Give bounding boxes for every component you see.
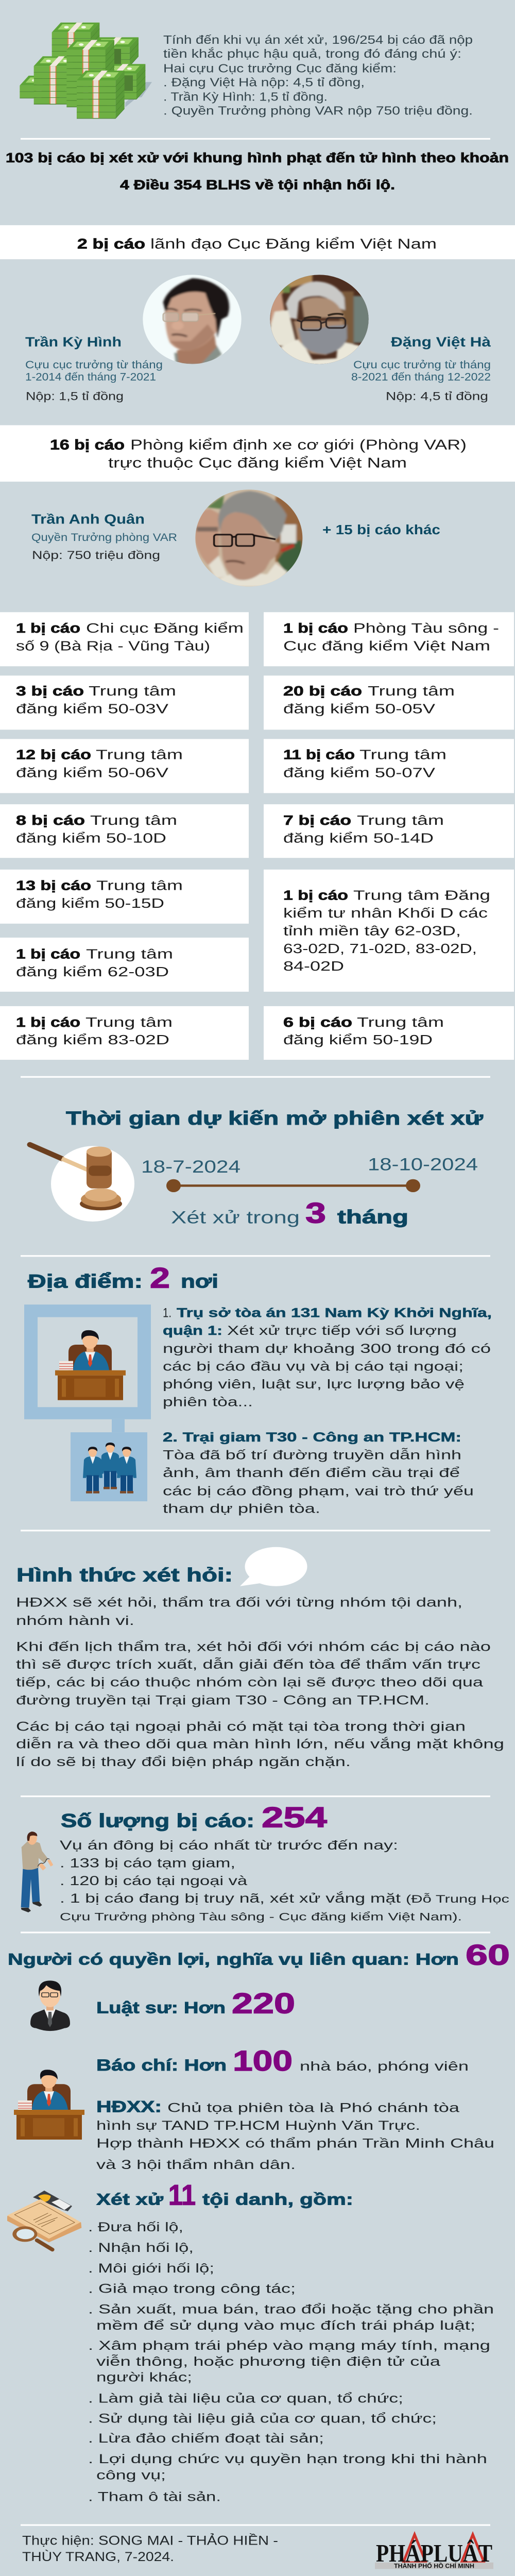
text: defendants breakdown [60,1838,509,1923]
intro text: Hai cựu Cục trưởng Cục đăng kiểm: [163,62,397,75]
text: lawyers [96,1987,295,2020]
card: 3 bị cáo 50-03V: 3 bị cáo [16,684,84,699]
text: press: Báo chí: Hơn [96,2056,227,2075]
text: trial panel: Chủ tọa phiên tòa là Phó chánh tòa [167,2100,459,2115]
card: 1 bị cáo khối D miền tây: 84-02D [283,958,344,974]
text: press: nhà báo, phóng viên [300,2059,469,2074]
heading: trial schedule: Thời gian dự kiến mở phiên xét xử [66,1108,484,1129]
card: 20 bị cáo 50-05V: Trung tâm [368,684,455,699]
text: questioning details [16,1595,504,1769]
photo: Đặng Việt Hà [269,273,372,366]
heading: 11 charges: Xét xử [96,2191,164,2209]
card: 1 bị cáo Chi cục 9: 1 bị cáo [16,620,80,636]
heading: 11 charges: 11 [168,2178,196,2211]
list: charges: viễn thông, hoặc phương tiện điện tử của [96,2354,440,2369]
heading band: 16 defendants VAR [0,425,515,482]
text: questioning details: đường truyền tại Trại giam T30 - Công an TP.HCM. [16,1693,430,1707]
card: 1 bị cáo khối D miền tây: 63-02D, 71-02D, 83-02D, [283,941,477,956]
text: location 1: người tham dự khoảng 300 trong đó có [163,1341,491,1356]
card: 1 bị cáo 83-02D: Trung tâm [85,1014,173,1029]
heading: 11 charges [96,2178,353,2211]
heading: location 2 places: 2 [150,1261,170,1294]
heading: number of defendants [61,1801,327,1834]
heading: related parties: 60 [466,1938,510,1971]
intro text: tiền khắc phục hậu quả, trong đó đáng chú ý: [163,47,461,61]
person: Trần Kỳ Hình: Nộp: 1,5 tỉ đồng [26,390,124,403]
person: Đặng Việt Hà: Nộp: 4,5 tỉ đồng [386,390,488,403]
text: trial panel: HĐXX: [96,2098,162,2116]
logo: Pháp Luật [375,2534,493,2569]
text: questioning details: lí do sẽ bị thay đổi biện pháp ngăn chặn. [16,1754,351,1769]
text: questioning details: diễn ra và theo dõi qua màn hình lớn, nếu vắng mặt không [16,1737,504,1751]
card: 11 bị cáo 50-07V: đăng kiểm 50-07V [283,765,436,780]
list: charges: . Xâm phạm trái phép vào mạng máy tính, mạng [88,2338,490,2353]
card: 13 bị cáo 50-15D: Trung tâm [96,878,183,893]
card: 1 bị cáo 62-03D: đăng kiểm 62-03D [16,964,169,979]
list: charges: . Làm giả tài liệu của cơ quan, tổ chức; [88,2391,403,2405]
intro text: . Trần Kỳ Hình: 1,5 tỉ đồng. [163,91,328,104]
card: 6 bị cáo 50-19D: 6 bị cáo [283,1014,352,1029]
card: 3 bị cáo 50-03V: Trung tâm [89,684,176,699]
card: 1 bị cáo 62-03D: 1 bị cáo [16,946,80,961]
text: location 1: phiên tòa... [163,1395,253,1409]
card: 7 bị cáo 50-14D [264,804,514,858]
card: 1 bị cáo khối D miền tây [264,870,514,992]
text: location 1: phóng viên, luật sư, lực lượng bảo vệ [163,1377,465,1392]
card: 6 bị cáo 50-19D: Trung tâm [357,1014,444,1029]
list: charges [88,2219,494,2504]
card: 3 bị cáo 50-03V [0,675,249,730]
intro text: . Đặng Việt Hà nộp: 4,5 tỉ đồng, [163,76,365,89]
photo: Trần Kỳ Hình [143,275,242,364]
icon: judge at desk [55,1330,126,1400]
text: defendants breakdown: . 133 bị cáo tạm giam, [60,1856,235,1870]
heading: related parties: Người có quyền lợi, nghĩa vụ liên quan: Hơn [8,1951,459,1969]
text: location 2: tham dự phiên tòa. [163,1501,320,1516]
card: 1 bị cáo 83-02D: đăng kiểm 83-02D [16,1032,169,1047]
card: 1 bị cáo Phòng Tàu sông: Cục đăng kiểm Việt Nam [283,638,490,653]
text: location 1: quận 1: [163,1323,222,1338]
heading: number of defendants: 254 [262,1801,327,1834]
card: 13 bị cáo 50-15D: 13 bị cáo [16,878,91,893]
list: charges: . Đưa hối lộ, [88,2219,183,2234]
text: location 1: Trụ sở tòa án 131 Nam Kỳ Khởi Nghĩa, [177,1306,492,1320]
text: location 1: các bị cáo đầu vụ và bị cáo tại ngoại; [163,1359,464,1374]
icon: case file and magnifier [7,2191,81,2250]
card: 6 bị cáo 50-19D: đăng kiểm 50-19D [283,1032,433,1047]
card: 1 bị cáo Chi cục 9 [0,612,249,666]
icon: stacks of money [20,23,152,118]
text: defendants breakdown: Cựu Trưởng phòng Tàu sông - Cục đăng kiểm Việt Nam). [60,1910,462,1923]
heading band: 2 leaders [0,225,515,259]
list: charges: . Tham ô tài sản. [88,2489,221,2504]
text: questioning details: tiếp, các bị cáo thuộc nhóm còn lại sẽ được theo dõi qua [16,1675,483,1689]
text: trial panel: và 3 hội thẩm nhân dân. [96,2157,296,2172]
text: location 2: ảnh, âm thanh đến điểm cầu trại để [163,1465,460,1480]
heading band: 16 defendants VAR: trực thuộc Cục đăng kiểm Việt Nam [108,455,407,471]
person: Trần Kỳ Hình: 1-2014 đến tháng 7-2021 [25,370,156,383]
timeline: dates [141,1154,478,1192]
card: 1 bị cáo Chi cục 9: số 9 (Bà Rịa - Vũng Tàu) [16,638,210,653]
text: location 2: các bị cáo đồng phạm, vai trò thứ yếu [163,1483,474,1498]
heading: related parties [8,1938,510,1971]
text: press: 100 [233,2044,293,2077]
heading: form of questioning: Hình thức xét hỏi: [16,1565,233,1586]
list: charges: . Giả mạo trong công tác; [88,2281,296,2296]
heading band: 2 leaders: 2 bị cáo [77,236,145,252]
card: 13 bị cáo 50-15D [0,870,249,924]
person: Trần Kỳ Hình [25,334,163,403]
text: defendants breakdown: . 1 bị cáo đang bị truy nã, xét xử vắng mặt [60,1891,401,1906]
icon: speech bubble [240,1547,307,1586]
person: Đặng Việt Hà [351,334,491,403]
label: plus 15 other defendants: + 15 bị cáo khác [322,522,440,537]
list: charges: . Lừa đảo chiếm đoạt tài sản; [88,2431,324,2446]
logo: Pháp Luật: THÀNH PHỐ HỒ CHÍ MINH [394,2562,474,2569]
card: 6 bị cáo 50-19D [264,1006,514,1060]
list: charges: . Sản xuất, mua bán, trao đổi hoặc tặng cho phần [88,2302,494,2316]
card: 1 bị cáo Chi cục 9: Chi cục Đăng kiểm [86,620,244,636]
card: 1 bị cáo khối D miền tây: kiểm tư nhân Khối D các [283,905,488,921]
card: 7 bị cáo 50-14D: đăng kiểm 50-14D [283,831,434,845]
text: location 2 [163,1430,474,1516]
card: 20 bị cáo 50-05V: đăng kiểm 50-05V [283,701,436,716]
callout: trial in 3 months: tháng [337,1207,408,1228]
person: Đặng Việt Hà: 8-2021 đến tháng 12-2022 [351,370,491,383]
text: location 1 [163,1306,492,1409]
text: press [96,2044,469,2077]
text: trial panel: hình sự TAND TP.HCM Huỳnh Văn Trực. [96,2118,420,2133]
heading: 11 charges: tội danh, gồm: [202,2191,353,2209]
card: 7 bị cáo 50-14D: Trung tâm [357,812,444,828]
card: 20 bị cáo 50-05V: 20 bị cáo [283,684,362,699]
text: location 2: Tòa đã bố trí đường truyền dẫn hình [163,1448,461,1462]
list: charges: người khác; [96,2370,192,2384]
callout: trial in 3 months: Xét xử trong [171,1207,300,1227]
list: charges: . Nhận hối lộ, [88,2240,194,2255]
card: 7 bị cáo 50-14D: 7 bị cáo [283,812,351,828]
heading band: 2 leaders: lãnh đạo Cục Đăng kiểm Việt Nam [150,236,437,252]
credits: THÙY TRANG, 7-2024. [22,2549,174,2564]
icon: gavel [30,1145,134,1222]
heading: number of defendants: Số lượng bị cáo: [61,1810,254,1832]
card: 1 bị cáo Phòng Tàu sông [264,612,514,666]
text: location 2: 2. Trại giam T30 - Công an TP.HCM: [163,1430,461,1445]
list: charges: mềm để sử dụng vào mục đích trái pháp luật; [96,2318,475,2333]
icon: handcuffed man [21,1832,53,1912]
card: 1 bị cáo 62-03D: Trung tâm [86,946,173,961]
text: questioning details: Các bị cáo tại ngoại phải có mặt tại tòa trong thời gian [16,1719,466,1734]
callout: 103 defendants: 103 bị cáo bị xét xử với khung hình phạt đến tử hình theo khoản [6,150,509,165]
text: lawyers: Luật sư: Hơn [96,1999,226,2017]
text: location 1: Xét xử trực tiếp với số lượng [227,1323,457,1338]
text: defendants breakdown: . 120 bị cáo tại ngoại và [60,1873,247,1888]
list: charges: . Môi giới hối lộ; [88,2261,214,2276]
card: 13 bị cáo 50-15D: đăng kiểm 50-15D [16,895,164,911]
text: location 1: 1. [163,1306,171,1320]
person: Trần Kỳ Hình: Trần Kỳ Hình [25,334,122,349]
card: 12 bị cáo 50-06V: Trung tâm [96,747,183,762]
list: charges: . Lợi dụng chức vụ quyền hạn trong khi thi hành [88,2451,487,2466]
card: 1 bị cáo khối D miền tây: tỉnh miền tây 62-03D, [283,923,461,938]
icon: lawyer [30,1980,70,2031]
list: charges: công vụ; [96,2468,166,2482]
card: 12 bị cáo 50-06V: 12 bị cáo [16,747,91,762]
card: 11 bị cáo 50-07V: 11 bị cáo [283,747,355,762]
card: 1 bị cáo khối D miền tây: 1 bị cáo [283,888,348,903]
icon: presiding judge [14,2070,84,2140]
credits [22,2533,278,2564]
timeline: dates: 18-10-2024 [368,1154,478,1174]
text: trial panel: Hợp thành HĐXX có thẩm phán Trần Minh Châu [96,2136,494,2150]
card: 12 bị cáo 50-06V [0,739,249,793]
person: Đặng Việt Hà: Đặng Việt Hà [391,334,491,349]
card: 1 bị cáo Phòng Tàu sông: 1 bị cáo [283,620,348,636]
person: Trần Anh Quân: Nộp: 750 triệu đồng [32,549,160,562]
text: questioning details: Khi đến lịch thẩm tra, xét hỏi đối với nhóm các bị cáo nào [16,1639,491,1654]
card: 12 bị cáo 50-06V: đăng kiểm 50-06V [16,765,169,780]
icon: three defendants [83,1443,136,1494]
card: 8 bị cáo 50-10D: đăng kiểm 50-10D [16,831,166,845]
list: charges: . Sử dụng tài liệu giả của cơ quan, tổ chức; [88,2411,437,2426]
card: 11 bị cáo 50-07V [264,739,514,793]
text: trial panel [96,2098,494,2172]
panel: location icons [24,1304,151,1501]
intro text: Tính đến khi vụ án xét xử, 196/254 bị cáo đã nộp [163,33,473,47]
callout: 103 defendants [6,150,509,192]
text: defendants breakdown: Vụ án đông bị cáo nhất từ trước đến nay: [60,1838,398,1853]
intro text [163,33,473,117]
heading: location 2 places [28,1261,218,1294]
heading: location 2 places: Địa điểm: [28,1271,143,1292]
heading band: 16 defendants VAR: 16 bị cáo [50,437,125,453]
person: Trần Kỳ Hình: Cựu cục trưởng từ tháng [25,359,163,371]
card: 1 bị cáo 83-02D [0,1006,249,1060]
callout: trial in 3 months: 3 [305,1197,326,1229]
card: 20 bị cáo 50-05V [264,675,514,730]
heading band: 16 defendants VAR: Phòng kiểm định xe cơ giới (Phòng VAR) [130,437,467,453]
callout: 103 defendants: 4 Điều 354 BLHS về tội nhận hối lộ. [120,177,395,192]
person: Trần Anh Quân: Quyền Trưởng phòng VAR [31,531,177,544]
text: questioning details: thì sẽ được trích xuất, dẫn giải đến tòa để thẩm vấn trực [16,1657,480,1672]
photo: Trần Anh Quân [195,489,303,586]
callout: trial in 3 months [171,1197,408,1229]
card: 8 bị cáo 50-10D: 8 bị cáo [16,812,85,828]
person: Trần Anh Quân: Trần Anh Quân [31,512,145,527]
person: Đặng Việt Hà: Cựu cục trưởng từ tháng [353,359,491,371]
text: questioning details: nhóm hành vi. [16,1613,134,1628]
credits: Thực hiện: SONG MAI - THẢO HIỀN - [22,2533,278,2548]
card: 1 bị cáo khối D miền tây: Trung tâm Đăng [353,888,490,903]
card: 1 bị cáo 83-02D: 1 bị cáo [16,1014,80,1029]
card: 8 bị cáo 50-10D [0,804,249,858]
text: questioning details: HĐXX sẽ xét hỏi, thẩm tra đối với từng nhóm tội danh, [16,1595,462,1609]
card: 1 bị cáo 62-03D [0,938,249,992]
card: 11 bị cáo 50-07V: Trung tâm [359,747,447,762]
timeline: dates: 18-7-2024 [141,1157,241,1177]
text: defendants breakdown: (Đỗ Trung Học [406,1892,509,1905]
card: 1 bị cáo Phòng Tàu sông: Phòng Tàu sông - [353,620,499,636]
intro text: . Quyền Trưởng phòng VAR nộp 750 triệu đồng. [163,105,473,117]
card: 3 bị cáo 50-03V: đăng kiểm 50-03V [16,701,169,716]
heading: location 2 places: nơi [181,1271,218,1292]
card: 8 bị cáo 50-10D: Trung tâm [90,812,177,828]
text: lawyers: 220 [232,1987,295,2020]
person: Trần Anh Quân [31,512,177,562]
